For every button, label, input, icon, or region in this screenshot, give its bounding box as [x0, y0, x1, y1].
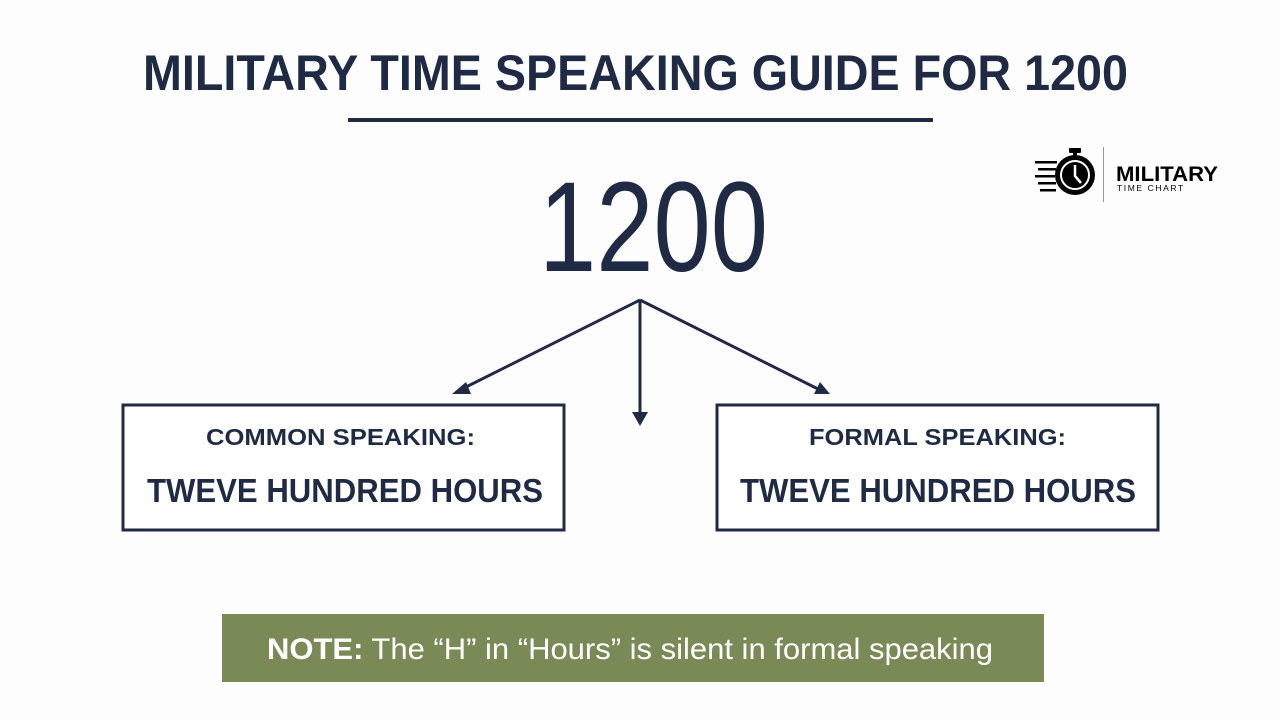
panel: common speaking: [123, 405, 564, 530]
note bar: [222, 614, 1044, 682]
panel: formal speaking: FORMAL SPEAKING:: [809, 424, 1066, 450]
note bar: NOTE: The “H” in “Hours” is silent in formal speaking: [267, 633, 993, 666]
arrows: [452, 300, 830, 426]
panel: formal speaking: TWEVE HUNDRED HOURS: [740, 472, 1136, 509]
logo: military time chart: [1035, 147, 1218, 202]
logo: military time chart: TIME CHART: [1117, 183, 1185, 193]
panel: formal speaking: [717, 405, 1158, 530]
panel: common speaking: COMMON SPEAKING:: [206, 424, 475, 450]
title: MILITARY TIME SPEAKING GUIDE FOR 1200: [143, 45, 1128, 101]
icon: stopwatch: [1035, 148, 1095, 195]
logo: military time chart: MILITARY: [1116, 163, 1218, 186]
panel: common speaking: TWEVE HUNDRED HOURS: [147, 472, 543, 509]
digital display 1200: 1200: [539, 156, 768, 299]
